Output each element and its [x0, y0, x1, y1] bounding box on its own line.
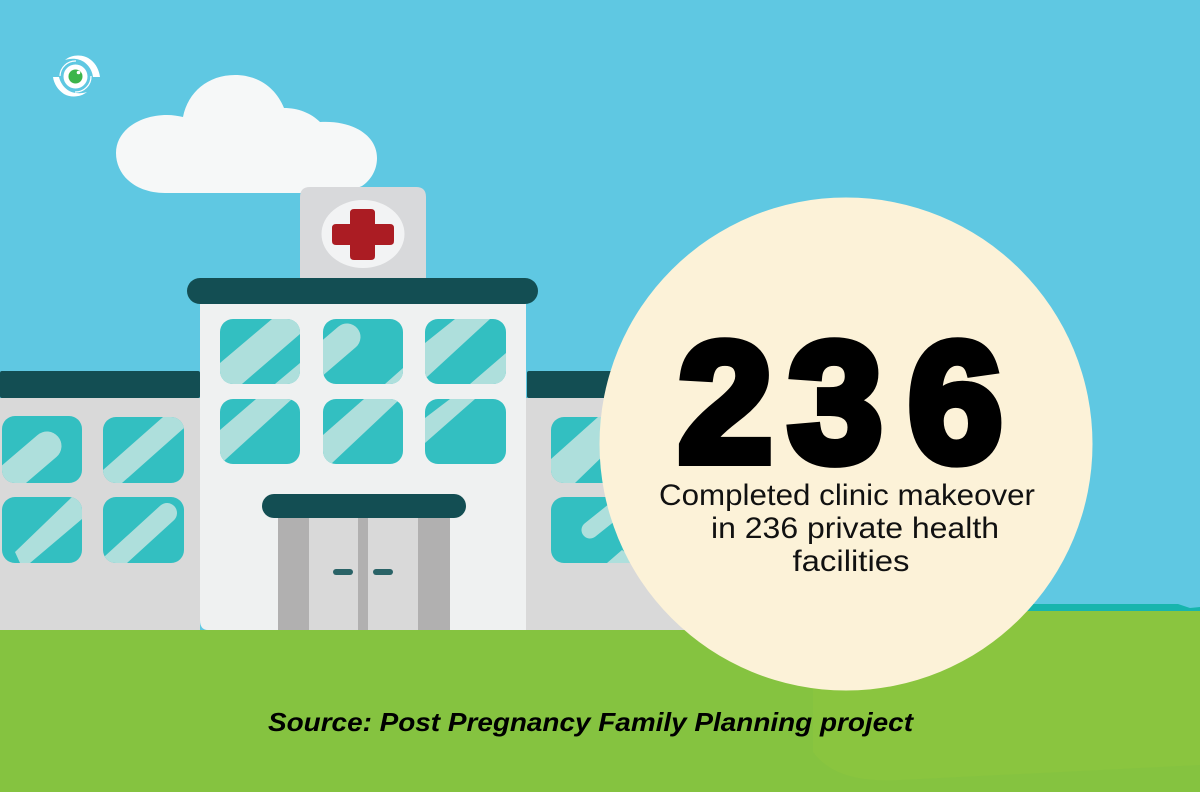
big number: 236	[678, 308, 1003, 498]
teal horizon strip	[1000, 604, 1200, 612]
central building	[187, 278, 538, 630]
entrance doors	[262, 494, 466, 630]
stat description: Completed clinic makeover	[659, 479, 1035, 512]
icon: red cross	[332, 209, 394, 260]
stat description: in 236 private health	[711, 512, 999, 545]
left wing windows	[2, 416, 184, 565]
right wing windows	[551, 417, 630, 563]
stat circle	[600, 198, 1092, 690]
cloud	[116, 75, 377, 193]
stat description	[659, 479, 1035, 578]
upper windows	[220, 319, 506, 464]
logo	[53, 56, 100, 96]
stat description: facilities	[792, 545, 910, 578]
ground	[0, 611, 1200, 792]
left wing	[0, 371, 200, 630]
right wing	[526, 371, 684, 630]
sign with red cross	[300, 187, 426, 278]
source line: Source: Post Pregnancy Family Planning project	[268, 707, 914, 737]
